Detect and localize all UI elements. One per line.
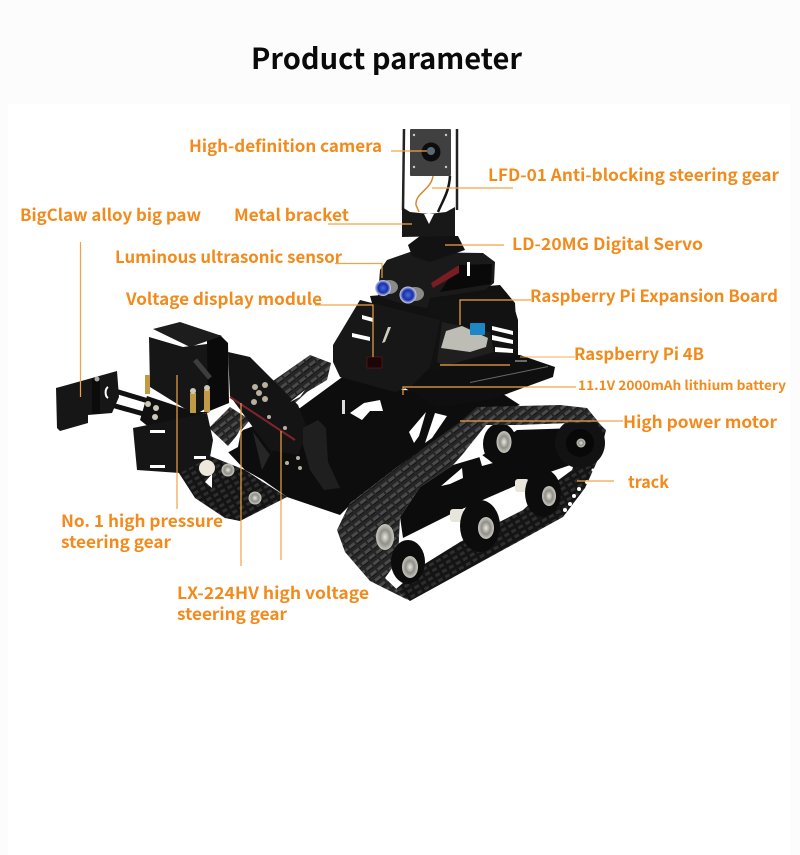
tray highlights	[470, 360, 548, 383]
arm servo horn and red wires	[230, 397, 340, 490]
road wheels	[391, 469, 561, 584]
top tray	[403, 355, 555, 407]
paw front claw	[56, 371, 119, 431]
camera board	[410, 129, 451, 176]
label: LD-20MG: LD-20MG Digital Servo	[512, 231, 703, 255]
robot illustration	[56, 129, 606, 601]
small white gap	[478, 452, 493, 466]
camera screws	[413, 134, 447, 168]
label: High power motor: High power motor	[623, 409, 778, 433]
label: Luminous ultrasonic sensor: Luminous ultrasonic sensor	[115, 244, 343, 268]
pan servo base	[408, 236, 465, 262]
front track top run	[337, 405, 605, 600]
upper road wheel	[483, 423, 517, 465]
label: Raspberry Pi Expansion Board: Raspberry Pi Expansion Board	[530, 283, 778, 307]
white triangle	[424, 214, 434, 224]
label: LFD-01: LFD-01 Anti-blocking steering gear	[488, 162, 780, 186]
brass standoffs	[145, 375, 210, 420]
battery compartment window	[437, 322, 494, 366]
label: BigClaw: BigClaw alloy big paw	[20, 202, 201, 226]
rear upper track	[270, 355, 331, 405]
head interior	[440, 264, 492, 292]
rear lower track	[177, 456, 287, 521]
track holes	[563, 468, 594, 512]
label: No. 1 high pressure steering gear	[61, 508, 223, 553]
front plate tip hub	[376, 524, 394, 550]
cat-ear plate	[402, 207, 455, 237]
head shell	[378, 252, 495, 308]
voltage display	[367, 357, 382, 368]
arm side plate bolts	[251, 382, 325, 470]
head logo plate	[431, 265, 459, 288]
head slot	[467, 262, 470, 276]
title: Product parameter	[251, 36, 522, 78]
body slots	[352, 315, 513, 353]
lower claw slots	[150, 430, 206, 468]
label: Raspberry Pi 4B: Raspberry Pi 4B	[574, 341, 704, 365]
chassis white cut-outs	[227, 390, 447, 453]
servo top plate	[153, 322, 222, 347]
servo bracket back	[207, 335, 229, 412]
rear mid track	[209, 407, 250, 446]
label: LX-224HV high voltage steering gear: steering gear	[177, 601, 288, 625]
label: High-definition camera: High-definition camera	[189, 133, 382, 157]
callout leader lines	[80, 151, 623, 566]
front track lower run	[395, 415, 606, 601]
servo underside fill	[140, 396, 210, 428]
paw claw highlights	[92, 376, 108, 414]
label: No. 1 high pressure steering gear: steering gear	[61, 529, 172, 553]
label: LX-224HV high voltage steering gear: LX-224HV high voltage	[177, 580, 369, 604]
label: LX-224HV high voltage steering gear	[177, 580, 369, 625]
side plate white gap	[441, 468, 463, 486]
chassis body	[228, 375, 520, 515]
servo box	[149, 337, 208, 415]
rear idler wheels	[199, 460, 262, 504]
front track side plate	[400, 428, 585, 538]
mid right housing	[420, 292, 518, 362]
blue terminal	[470, 323, 485, 335]
arm side plate	[228, 352, 308, 455]
raspberry pi board	[441, 326, 488, 352]
mid left box	[333, 300, 440, 392]
paw arms	[108, 391, 158, 418]
label: battery: 11.1V 2000mAh lithium battery	[578, 375, 787, 394]
camera bracket arms	[403, 129, 457, 210]
label: Voltage display module: Voltage display module	[125, 286, 322, 310]
camera wires	[416, 176, 450, 212]
label: track: track	[628, 469, 669, 493]
lower claw bracket	[133, 413, 213, 473]
ultrasonic sensors	[375, 280, 424, 304]
sprocket wheel	[555, 418, 605, 468]
label: No. 1 high pressure steering gear: No. 1 high pressure	[61, 508, 223, 532]
body dark backing	[370, 285, 518, 385]
servo wire	[195, 360, 210, 378]
axle spacers	[450, 479, 529, 522]
camera lens	[422, 142, 440, 162]
label: Metal bracket: Metal bracket	[234, 202, 349, 226]
